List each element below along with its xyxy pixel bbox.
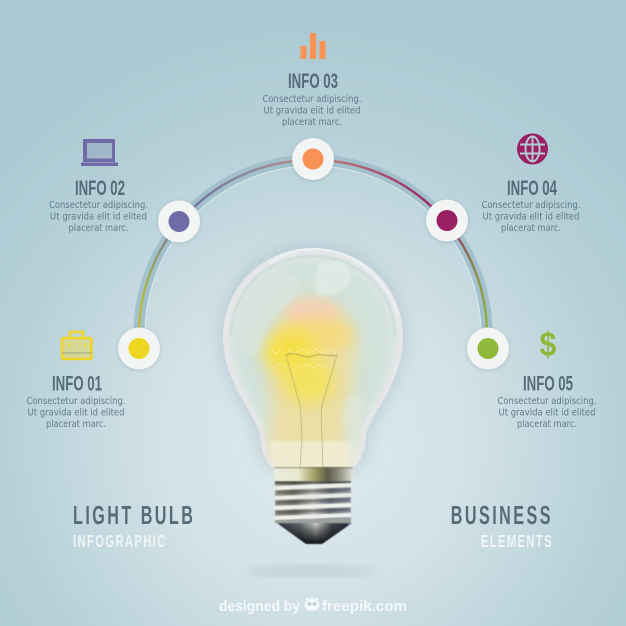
footer credit: designed by — [219, 599, 300, 615]
info 03 text: Consectetur adipiscing. — [262, 94, 362, 105]
node 01 — [118, 328, 160, 370]
semicircular timeline arc — [139, 160, 487, 349]
light bulb — [215, 240, 410, 544]
info 03 text: placerat marc. — [282, 117, 342, 128]
info 05 text: INFO 05 — [523, 372, 573, 396]
icon: globe — [517, 134, 548, 164]
filament — [271, 349, 337, 467]
info 01 text: placerat marc. — [46, 419, 106, 430]
icon: dollar sign: $ — [540, 325, 556, 363]
bulb glass — [223, 248, 403, 468]
floor shadow — [245, 568, 377, 574]
info 03 text: Ut gravida elit id elited — [264, 106, 361, 116]
icon: briefcase — [62, 332, 92, 359]
info 05 text: Ut gravida elit id elited — [498, 408, 596, 418]
info 01 text — [26, 372, 126, 430]
title: light bulb: LIGHT BULB — [73, 500, 195, 530]
info 03 text: INFO 03 — [288, 70, 338, 93]
icon: laptop — [81, 139, 118, 166]
info 05 text: Consectetur adipiscing. — [498, 396, 596, 407]
info 04 text: Consectetur adipiscing. — [482, 200, 580, 211]
info 03 text — [262, 70, 362, 128]
icon: freepik logo — [304, 596, 320, 611]
subtitle: elements: ELEMENTS — [481, 531, 553, 552]
info 04 text: placerat marc. — [501, 223, 561, 234]
icon: bar chart — [300, 33, 326, 59]
node 04 — [426, 200, 468, 242]
footer credit — [219, 596, 407, 615]
info 02 text: Ut gravida elit id elited — [50, 212, 147, 222]
node 03 — [292, 138, 334, 181]
bulb shadow — [223, 248, 403, 468]
info 01 text: Ut gravida elit id elited — [28, 408, 125, 418]
info 02 text: INFO 02 — [75, 177, 125, 200]
info 01 text: Consectetur adipiscing. — [26, 396, 126, 407]
metal screw base — [274, 467, 353, 544]
info 05 text — [498, 372, 596, 430]
info 01 text: INFO 01 — [52, 372, 102, 396]
info 05 text: placerat marc. — [517, 419, 577, 430]
info 02 text: Consectetur adipiscing. — [49, 200, 148, 211]
info 04 text: INFO 04 — [507, 177, 557, 200]
title: business: BUSINESS — [451, 500, 553, 530]
info 04 text: Ut gravida elit id elited — [482, 212, 580, 222]
node 05 — [467, 328, 509, 370]
node 02 — [158, 200, 200, 243]
subtitle: infographic: INFOGRAPHIC — [73, 531, 167, 552]
footer credit: freepik.com — [322, 599, 407, 615]
metal tip — [277, 523, 352, 544]
info 02 text — [49, 177, 148, 234]
info 02 text: placerat marc. — [68, 223, 128, 234]
info 04 text — [482, 177, 580, 234]
